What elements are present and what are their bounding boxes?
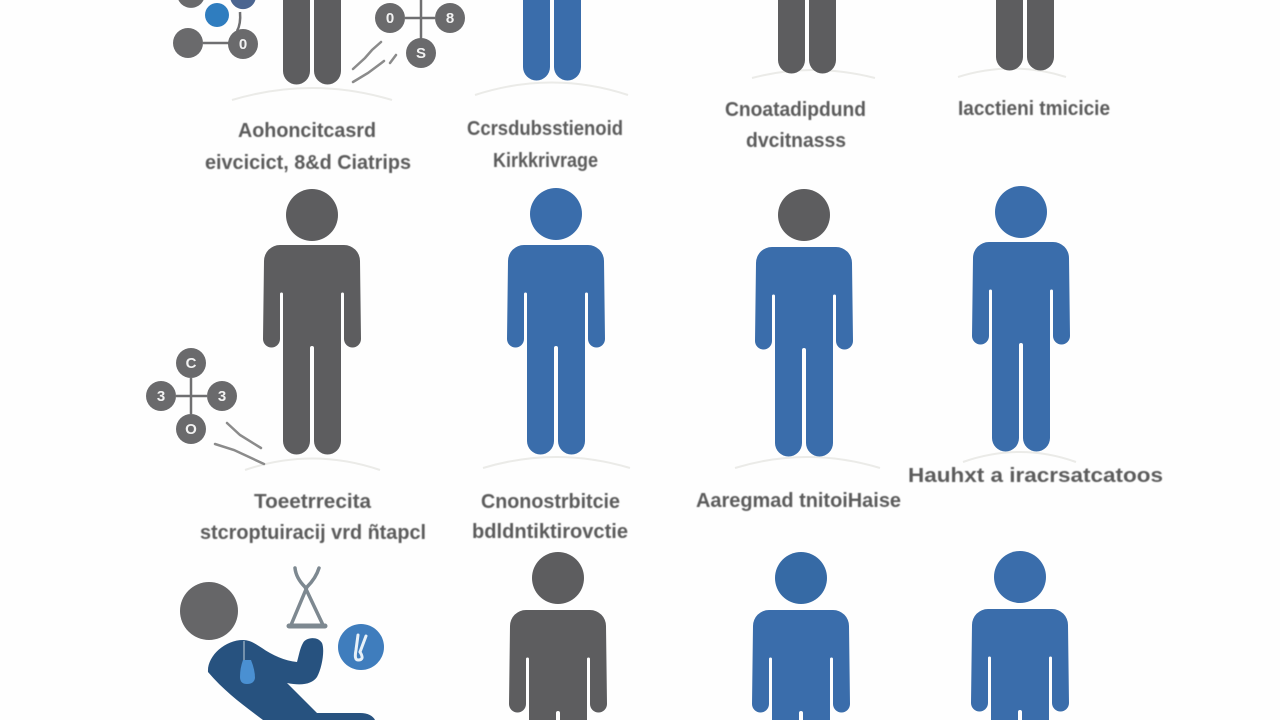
icon: molecule, row 2: O: [185, 421, 197, 438]
icon: molecule right, row 1: S: [416, 45, 426, 62]
figure: grey person, row 3 column 2: [509, 552, 607, 720]
label: row 2 column 2: bdldntiktirovctie: [472, 521, 628, 543]
label: row 2 column 1: [200, 491, 426, 544]
label: row 1 column 1: Aohoncitcasrd: [238, 120, 376, 142]
icon: molecule right, row 1: [353, 0, 465, 82]
figure: grey person legs, row 1 column 4: [996, 0, 1054, 70]
figure: blue person, row 2 column 4: [972, 186, 1070, 451]
label: row 1 column 2: [467, 118, 623, 172]
icon: patient head: [180, 582, 238, 640]
figure: blue person legs, row 1 column 2: [523, 0, 581, 80]
icon: blue badge: [338, 624, 384, 670]
icon: molecule, row 2: 3: [157, 388, 165, 405]
icon: molecule, row 2: C: [186, 355, 197, 372]
label: row 1 column 3: [725, 99, 866, 152]
icon: molecule left, row 1: 0: [239, 36, 247, 53]
figure: grey head and blue body, row 2 column 3: [755, 189, 853, 456]
figure: blue person, row 3 column 4: [971, 551, 1069, 720]
label: row 1 column 3: dvcitnasss: [746, 130, 846, 152]
label: row 2 column 3: Aaregmad tnitoiHaise: [696, 490, 901, 512]
icon: tool: [289, 568, 325, 626]
label: row 1 column 4: Iacctieni tmicicie: [958, 98, 1110, 120]
label: row 2 column 4: Hauhxt a iracrsatcatoos: [908, 465, 1163, 487]
figure: grey person legs, row 1 column 1: [283, 0, 341, 84]
label: row 2 column 2: Cnonostrbitcie: [481, 491, 620, 513]
label: row 2 column 2: [472, 491, 628, 543]
figure: grey person, row 2 column 1: [263, 189, 361, 454]
row 1 column 4: figure and label: [958, 0, 1110, 120]
row 2 column 1: figure with molecule and label: [146, 189, 426, 544]
label: row 2 column 1: stcroptuiracij vrd ñtapcl: [200, 522, 426, 544]
label: row 1 column 2: Ccrsdubsstienoid: [467, 118, 623, 140]
row 1 column 1: figure with molecules and label: [173, 0, 465, 174]
icon: molecule left, row 1: [173, 0, 258, 59]
label: row 1 column 1: [205, 120, 411, 174]
row 2 column 3: figure and label: [696, 189, 901, 512]
row 2 column 2: figure and label: [472, 188, 630, 543]
figure: blue person, row 2 column 2: [507, 188, 605, 454]
row 2 column 4: figure and label: [908, 186, 1163, 487]
figure: grey person legs, row 1 column 3: [778, 0, 836, 73]
label: row 1 column 1: eivcicict, 8&d Ciatrips: [205, 152, 411, 174]
label: row 1 column 2: Kirkkrivrage: [493, 150, 598, 172]
icon: molecule right, row 1: 0: [386, 10, 394, 27]
row 1 column 2: figure and label: [467, 0, 628, 172]
icon: molecule, row 2: [146, 348, 264, 464]
icon: molecule right, row 1: 8: [446, 10, 454, 27]
label: row 2 column 1: Toeetrrecita: [254, 491, 372, 513]
row 3 column 1: reclining patient with tool and badge: [180, 568, 384, 720]
icon: reclining patient body: [208, 638, 375, 720]
icon: IV drip: [240, 641, 255, 684]
figure: blue person, row 3 column 3: [752, 552, 850, 720]
icon: molecule, row 2: 3: [218, 388, 226, 405]
label: row 1 column 3: Cnoatadipdund: [725, 99, 866, 121]
row 1 column 3: figure and label: [725, 0, 875, 152]
